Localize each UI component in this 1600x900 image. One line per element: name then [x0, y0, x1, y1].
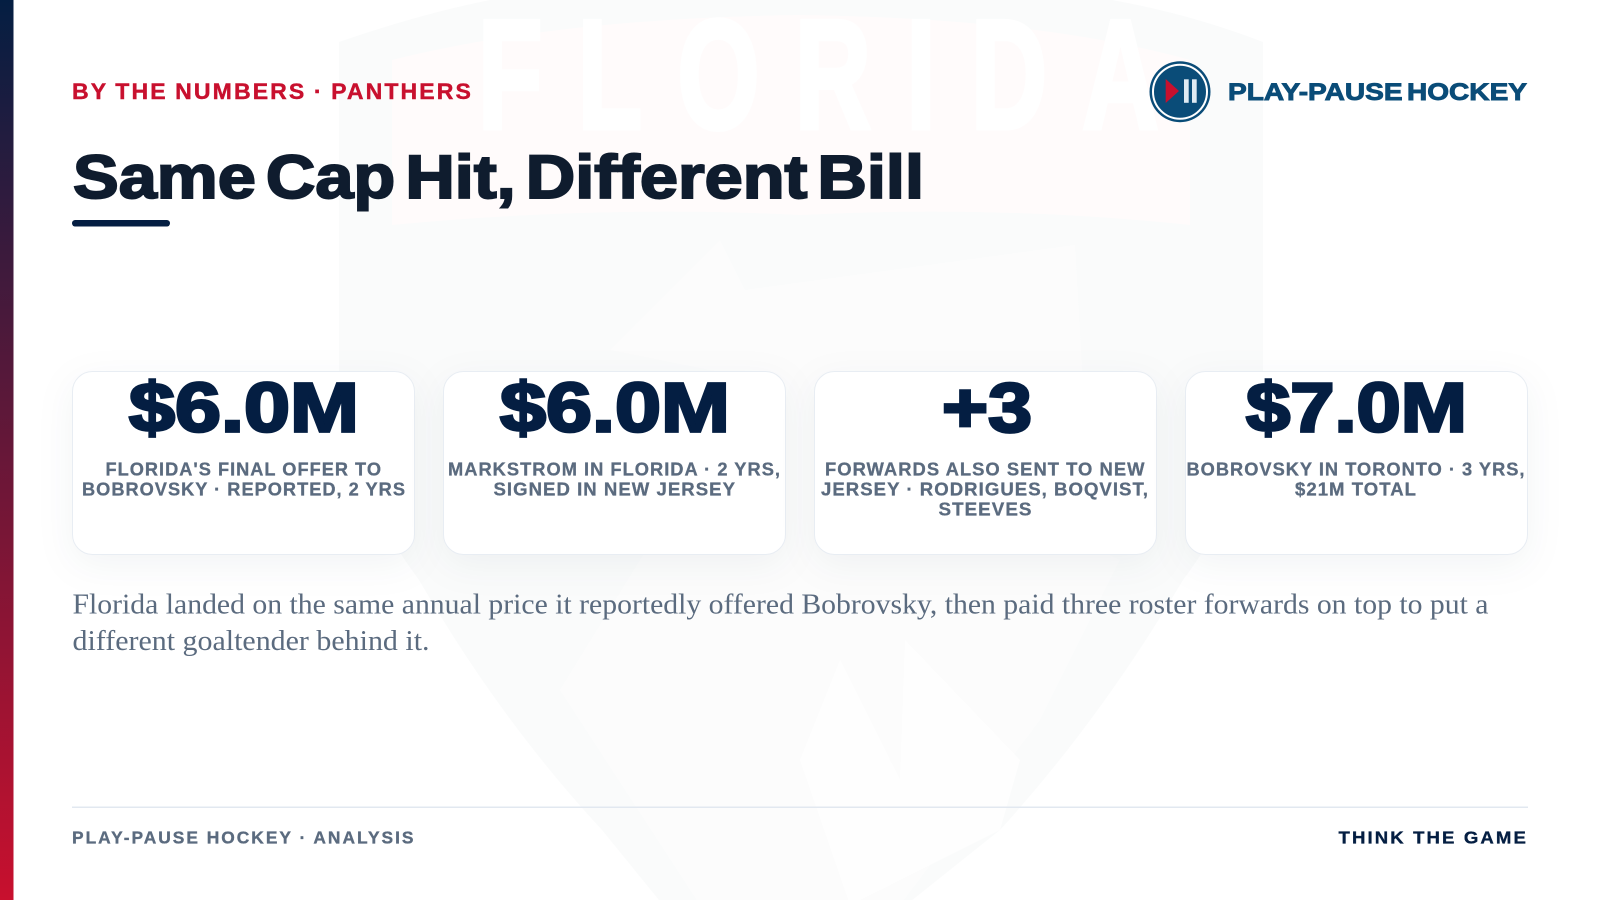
- summary paragraph: [72, 590, 1489, 657]
- title underline: [72, 220, 170, 226]
- summary paragraph: different goaltender behind it.: [72, 626, 430, 657]
- description: STEEVES: [938, 499, 1032, 519]
- description: SIGNED IN NEW JERSEY: [494, 479, 736, 499]
- description: [448, 459, 781, 499]
- watermark shield body: [339, 0, 1263, 900]
- value: $6.0M: [129, 368, 359, 446]
- left gradient accent bar: [0, 0, 14, 900]
- description: BOBROVSKY IN TORONTO · 3 YRS,: [1186, 459, 1526, 479]
- value: +3: [942, 368, 1032, 446]
- summary paragraph: Florida landed on the same annual price it reportedly offered Bobrovsky, then paid three roster forwards on top to put a: [72, 590, 1489, 620]
- watermark red band: [392, 15, 1190, 225]
- watermark streaks: [800, 640, 1020, 900]
- footer tagline: THINK THE GAME: [1338, 827, 1528, 847]
- watermark panther: [560, 240, 1120, 900]
- value: $6.0M: [500, 368, 730, 446]
- stat card 3: [814, 368, 1156, 554]
- description: [82, 459, 406, 499]
- footer left text: PLAY-PAUSE HOCKEY · ANALYSIS: [72, 827, 416, 847]
- eyebrow: BY THE NUMBERS · PANTHERS: [72, 79, 473, 104]
- stat card 2: [444, 368, 786, 554]
- icon: play-pause: [1150, 61, 1210, 122]
- description: [821, 459, 1149, 519]
- brand name: PLAY-PAUSE HOCKEY: [1228, 79, 1527, 106]
- description: BOBROVSKY · REPORTED, 2 YRS: [82, 479, 406, 499]
- description: [1186, 459, 1526, 499]
- description: FLORIDA'S FINAL OFFER TO: [106, 459, 382, 479]
- description: JERSEY · RODRIGUES, BOQVIST,: [821, 479, 1149, 499]
- brand logo: [1150, 61, 1527, 122]
- title: Same Cap Hit, Different Bill: [73, 143, 924, 211]
- footer: [72, 806, 1528, 847]
- stat card 1: [72, 368, 414, 554]
- description: FORWARDS ALSO SENT TO NEW: [825, 459, 1146, 479]
- watermark: Florida Panthers shield: [339, 0, 1263, 900]
- description: MARKSTROM IN FLORIDA · 2 YRS,: [448, 459, 781, 479]
- value: $7.0M: [1246, 368, 1467, 446]
- stat card 4: [1186, 368, 1528, 554]
- description: $21M TOTAL: [1295, 479, 1417, 499]
